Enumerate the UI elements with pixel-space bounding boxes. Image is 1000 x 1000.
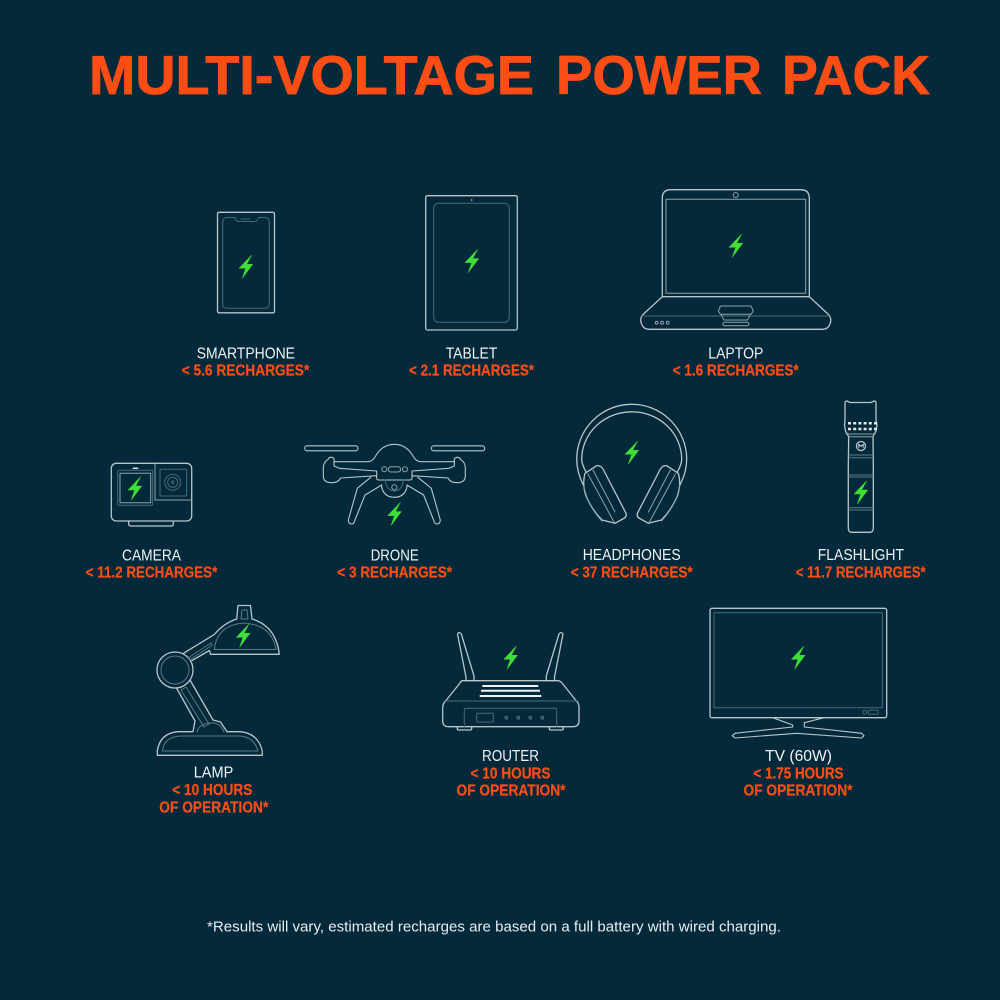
- value: drone recharges: < 3 RECHARGES*: [337, 564, 453, 581]
- icon: tablet: [426, 196, 517, 330]
- value: tablet recharges: < 2.1 RECHARGES*: [409, 363, 535, 380]
- device: tablet: [409, 196, 535, 380]
- label: lamp: LAMP: [194, 765, 233, 782]
- icon: headphones: [577, 404, 687, 523]
- value: router hours: < 10 HOURS: [470, 765, 551, 782]
- value: smartphone recharges: < 5.6 RECHARGES*: [182, 363, 310, 380]
- label: camera: CAMERA: [122, 547, 181, 564]
- device: flashlight: [796, 401, 926, 581]
- value: camera recharges: < 11.2 RECHARGES*: [86, 564, 218, 581]
- value: tv operation: OF OPERATION*: [744, 782, 853, 799]
- icon: flashlight: [844, 401, 878, 532]
- icon: smartphone: [218, 212, 274, 313]
- value: router operation: OF OPERATION*: [456, 782, 566, 799]
- device: router: [443, 632, 579, 799]
- value: lamp operation: OF OPERATION*: [159, 799, 269, 816]
- label: headphones: HEADPHONES: [583, 547, 681, 564]
- label: tablet: TABLET: [446, 346, 497, 362]
- value: headphones recharges: < 37 RECHARGES*: [571, 564, 693, 581]
- icon: lamp: [157, 606, 279, 755]
- icon: drone: [305, 444, 485, 526]
- title: [89, 45, 930, 106]
- device: headphones: [571, 404, 693, 581]
- label: smartphone: SMARTPHONE: [197, 346, 295, 362]
- value: laptop recharges: < 1.6 RECHARGES*: [673, 363, 799, 380]
- label: laptop: LAPTOP: [708, 346, 763, 362]
- value: lamp hours: < 10 HOURS: [172, 782, 253, 799]
- device: lamp: [157, 606, 279, 816]
- icon: router: [443, 632, 579, 730]
- title: POWER: [556, 45, 762, 106]
- title: MULTI-VOLTAGE: [89, 45, 534, 106]
- label: flashlight: FLASHLIGHT: [818, 547, 904, 564]
- icon: tv: [710, 608, 887, 738]
- device: tv: [710, 608, 887, 799]
- device: drone: [305, 444, 485, 581]
- footnote: *Results will vary, estimated recharges are based on a full battery with wired charging.: [207, 918, 781, 935]
- icon: laptop: [641, 190, 831, 329]
- icon: camera: [111, 463, 192, 526]
- device: camera: [86, 463, 218, 581]
- title: PACK: [782, 45, 930, 106]
- value: flashlight recharges: < 11.7 RECHARGES*: [796, 564, 926, 581]
- label: router: ROUTER: [482, 748, 539, 765]
- label: tv: TV (60W): [765, 748, 832, 765]
- device: laptop: [641, 190, 831, 380]
- device: smartphone: [182, 212, 310, 380]
- value: tv hours: < 1.75 HOURS: [754, 765, 844, 782]
- label: drone: DRONE: [371, 547, 419, 564]
